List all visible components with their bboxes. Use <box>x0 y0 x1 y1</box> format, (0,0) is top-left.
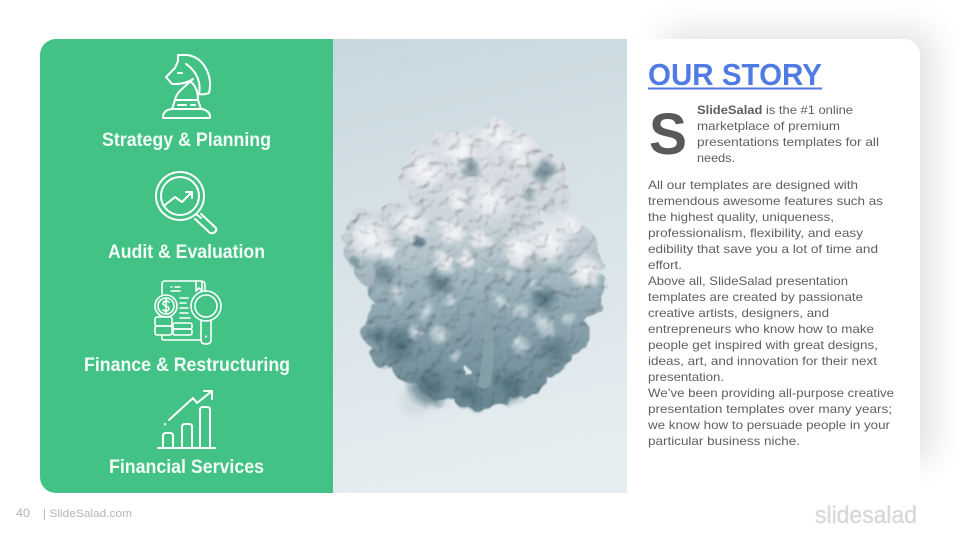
intro paragraph: presentations templates for all <box>697 135 879 149</box>
label: finance and restructuring: Finance & Restructuring <box>84 355 290 376</box>
body paragraph: experience: we know how to persuade people in your <box>647 418 890 432</box>
panel: green services <box>40 39 333 493</box>
body paragraph: templates: professionalism, flexibility, and easy <box>648 226 863 240</box>
intro paragraph: marketplace of premium <box>697 119 840 133</box>
cloud puffs: shadows <box>348 156 575 413</box>
image: ink cloud photo <box>333 39 627 493</box>
body paragraph: templates: edibility that save you a lot of time and <box>648 242 878 256</box>
intro paragraph: SlideSalad is the #1 online <box>697 103 853 117</box>
body paragraph: creators: creative artists, designers, and <box>648 306 829 320</box>
body paragraph: templates <box>648 178 883 272</box>
footer: page number and site: | SlideSalad.com <box>43 508 132 520</box>
icon: finance document with coins <box>155 281 221 344</box>
drop cap S: S <box>649 102 687 167</box>
icon: magnifier with chart <box>156 172 216 233</box>
body paragraph: templates: the highest quality, uniqueness, <box>648 210 834 224</box>
title: OUR STORY <box>648 57 822 92</box>
body paragraph: experience <box>647 386 894 448</box>
body paragraph: creators: presentation. <box>648 370 724 384</box>
label: strategy and planning: Strategy & Planning <box>102 130 271 151</box>
body paragraph: experience: presentation templates over many years; <box>648 402 892 416</box>
label: financial services: Financial Services <box>109 457 264 478</box>
cloud texture <box>343 119 608 410</box>
cloud centre ridge <box>478 292 494 388</box>
intro paragraph: needs. <box>697 151 735 165</box>
body paragraph: creators: Above all, SlideSalad presentation <box>648 274 848 288</box>
label: audit and evaluation: Audit & Evaluation <box>108 242 265 263</box>
body paragraph: creators: ideas, art, and innovation for their next <box>648 354 878 368</box>
cloud puffs: upper light <box>344 115 605 290</box>
footer: page number and site <box>16 506 132 520</box>
panel: story card <box>620 39 920 493</box>
body paragraph: creators: entrepreneurs who know how to make <box>648 322 874 336</box>
cloud puffs: lower highlights <box>388 262 581 364</box>
body paragraph: creators: templates are created by passionate <box>648 290 863 304</box>
body paragraph: experience: particular business niche. <box>648 434 800 448</box>
icon: growth bar chart <box>158 391 215 448</box>
icon: chess knight <box>163 55 210 118</box>
intro paragraph <box>697 103 879 165</box>
logo: slidesalad: slidesalad <box>815 502 917 529</box>
body paragraph: templates: effort. <box>648 258 682 272</box>
body paragraph: creators <box>648 274 878 384</box>
body paragraph: experience: We’ve been providing all-purpose creative <box>648 386 894 400</box>
body paragraph: templates: All our templates are designed with <box>648 178 858 192</box>
footer: page number and site: 40 <box>16 506 30 520</box>
story card shadow <box>660 28 936 464</box>
body paragraph: templates: tremendous awesome features such as <box>648 194 883 208</box>
body paragraph: creators: people get inspired with great designs, <box>648 338 878 352</box>
